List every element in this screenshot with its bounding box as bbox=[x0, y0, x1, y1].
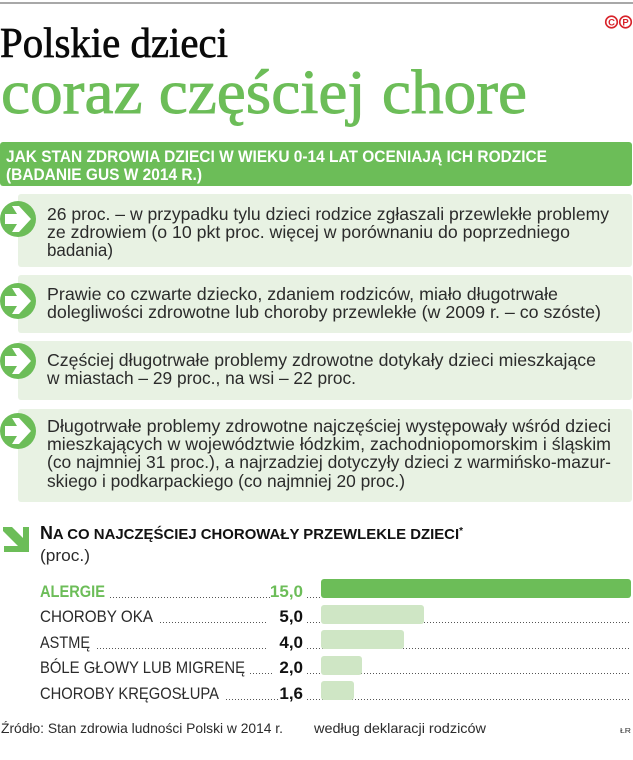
row: asthma: 4,0 bbox=[279, 633, 303, 652]
row: headaches: BÓLE GŁOWY LUB MIGRENĘ bbox=[40, 658, 245, 677]
text: finding 4: (co najmniej 31 proc.), a najrzadziej dotyczyły dzieci z warmińsko-mazur- bbox=[47, 452, 611, 472]
icon: down-right arrow bbox=[3, 527, 29, 552]
row: headaches bbox=[40, 656, 362, 677]
panel: finding 4 bbox=[0, 409, 632, 502]
text: finding 2: dolegliwości zdrowotne lub choroby przewlekłe (w 2009 r. – co szóste) bbox=[47, 302, 601, 322]
title: Polskie dzieci bbox=[0, 21, 228, 67]
text: finding 1 bbox=[47, 204, 609, 260]
panel: section header bbox=[0, 142, 632, 186]
row: allergies: 15,0 bbox=[270, 582, 303, 601]
title bbox=[0, 21, 527, 127]
row: allergies bbox=[40, 579, 631, 601]
chart heading bbox=[40, 523, 463, 565]
text: finding 2 bbox=[47, 284, 601, 322]
row: headaches: 2,0 bbox=[279, 658, 303, 677]
text: finding 1: ze zdrowiem (o 10 pkt proc. więcej w porównaniu do poprzedniego bbox=[47, 222, 570, 242]
chart heading: * bbox=[459, 526, 463, 537]
icon: copyright and press marks bbox=[606, 16, 631, 28]
source note: Źródło: Stan zdrowia ludności Polski w 2014 r. bbox=[1, 720, 283, 736]
row: spine diseases bbox=[40, 681, 354, 703]
title: coraz częściej chore bbox=[1, 59, 527, 127]
text: finding 1: badania) bbox=[47, 240, 113, 260]
row: eye diseases: 5,0 bbox=[279, 607, 303, 626]
icon: arrow in circle 2 bbox=[0, 283, 36, 319]
chart heading: NA CO NAJCZĘŚCIEJ CHOROWAŁY PRZEWLEKLE DZIECI bbox=[40, 523, 461, 543]
panel: finding 3 bbox=[0, 341, 632, 400]
row: allergies: ALERGIE bbox=[40, 583, 105, 601]
icon: copyright and press marks: P bbox=[622, 18, 629, 28]
row: eye diseases bbox=[40, 605, 424, 626]
row: eye diseases: CHOROBY OKA bbox=[40, 608, 153, 626]
source note: ŁR bbox=[620, 726, 632, 735]
icon: arrow in circle 4 bbox=[0, 413, 36, 449]
row: spine diseases: CHOROBY KRĘGOSŁUPA bbox=[40, 685, 219, 703]
text: finding 3: w miastach – 29 proc., na wsi – 22 proc. bbox=[46, 368, 356, 388]
chart heading: (proc.) bbox=[40, 547, 90, 565]
row: spine diseases: 1,6 bbox=[279, 684, 303, 703]
text: finding 4: mieszkających w województwie łódzkim, zachodniopomorskim i śląskim bbox=[47, 434, 611, 454]
row: asthma: ASTMĘ bbox=[40, 634, 90, 652]
icon: copyright and press marks: C bbox=[608, 18, 615, 28]
panel: finding 1 bbox=[0, 194, 632, 267]
row: asthma bbox=[40, 630, 404, 652]
text: finding 2: Prawie co czwarte dziecko, zdaniem rodziców, miało długotrwałe bbox=[47, 284, 558, 304]
text: finding 4 bbox=[47, 416, 611, 491]
text: finding 3 bbox=[46, 350, 596, 388]
panel: section header: (BADANIE GUS W 2014 R.) bbox=[6, 165, 202, 184]
source note: według deklaracji rodziców bbox=[313, 720, 487, 736]
bar chart bbox=[40, 579, 631, 703]
text: finding 3: Częściej długotrwałe problemy zdrowotne dotykały dzieci mieszkające bbox=[47, 350, 596, 370]
panel: section header: JAK STAN ZDROWIA DZIECI W WIEKU 0-14 LAT OCENIAJĄ ICH RODZICE bbox=[6, 147, 547, 166]
icon: arrow in circle 3 bbox=[0, 343, 36, 379]
text: finding 1: 26 proc. – w przypadku tylu dzieci rodzice zgłaszali przewlekłe problemy bbox=[47, 204, 609, 224]
text: finding 4: skiego i podkarpackiego (co najmniej 20 proc.) bbox=[47, 471, 405, 491]
icon: arrow in circle 1 bbox=[0, 201, 36, 237]
source note bbox=[1, 720, 632, 736]
text: finding 4: Długotrwałe problemy zdrowotne najczęściej występowały wśród dzieci bbox=[47, 416, 611, 436]
panel: finding 2 bbox=[0, 275, 632, 333]
